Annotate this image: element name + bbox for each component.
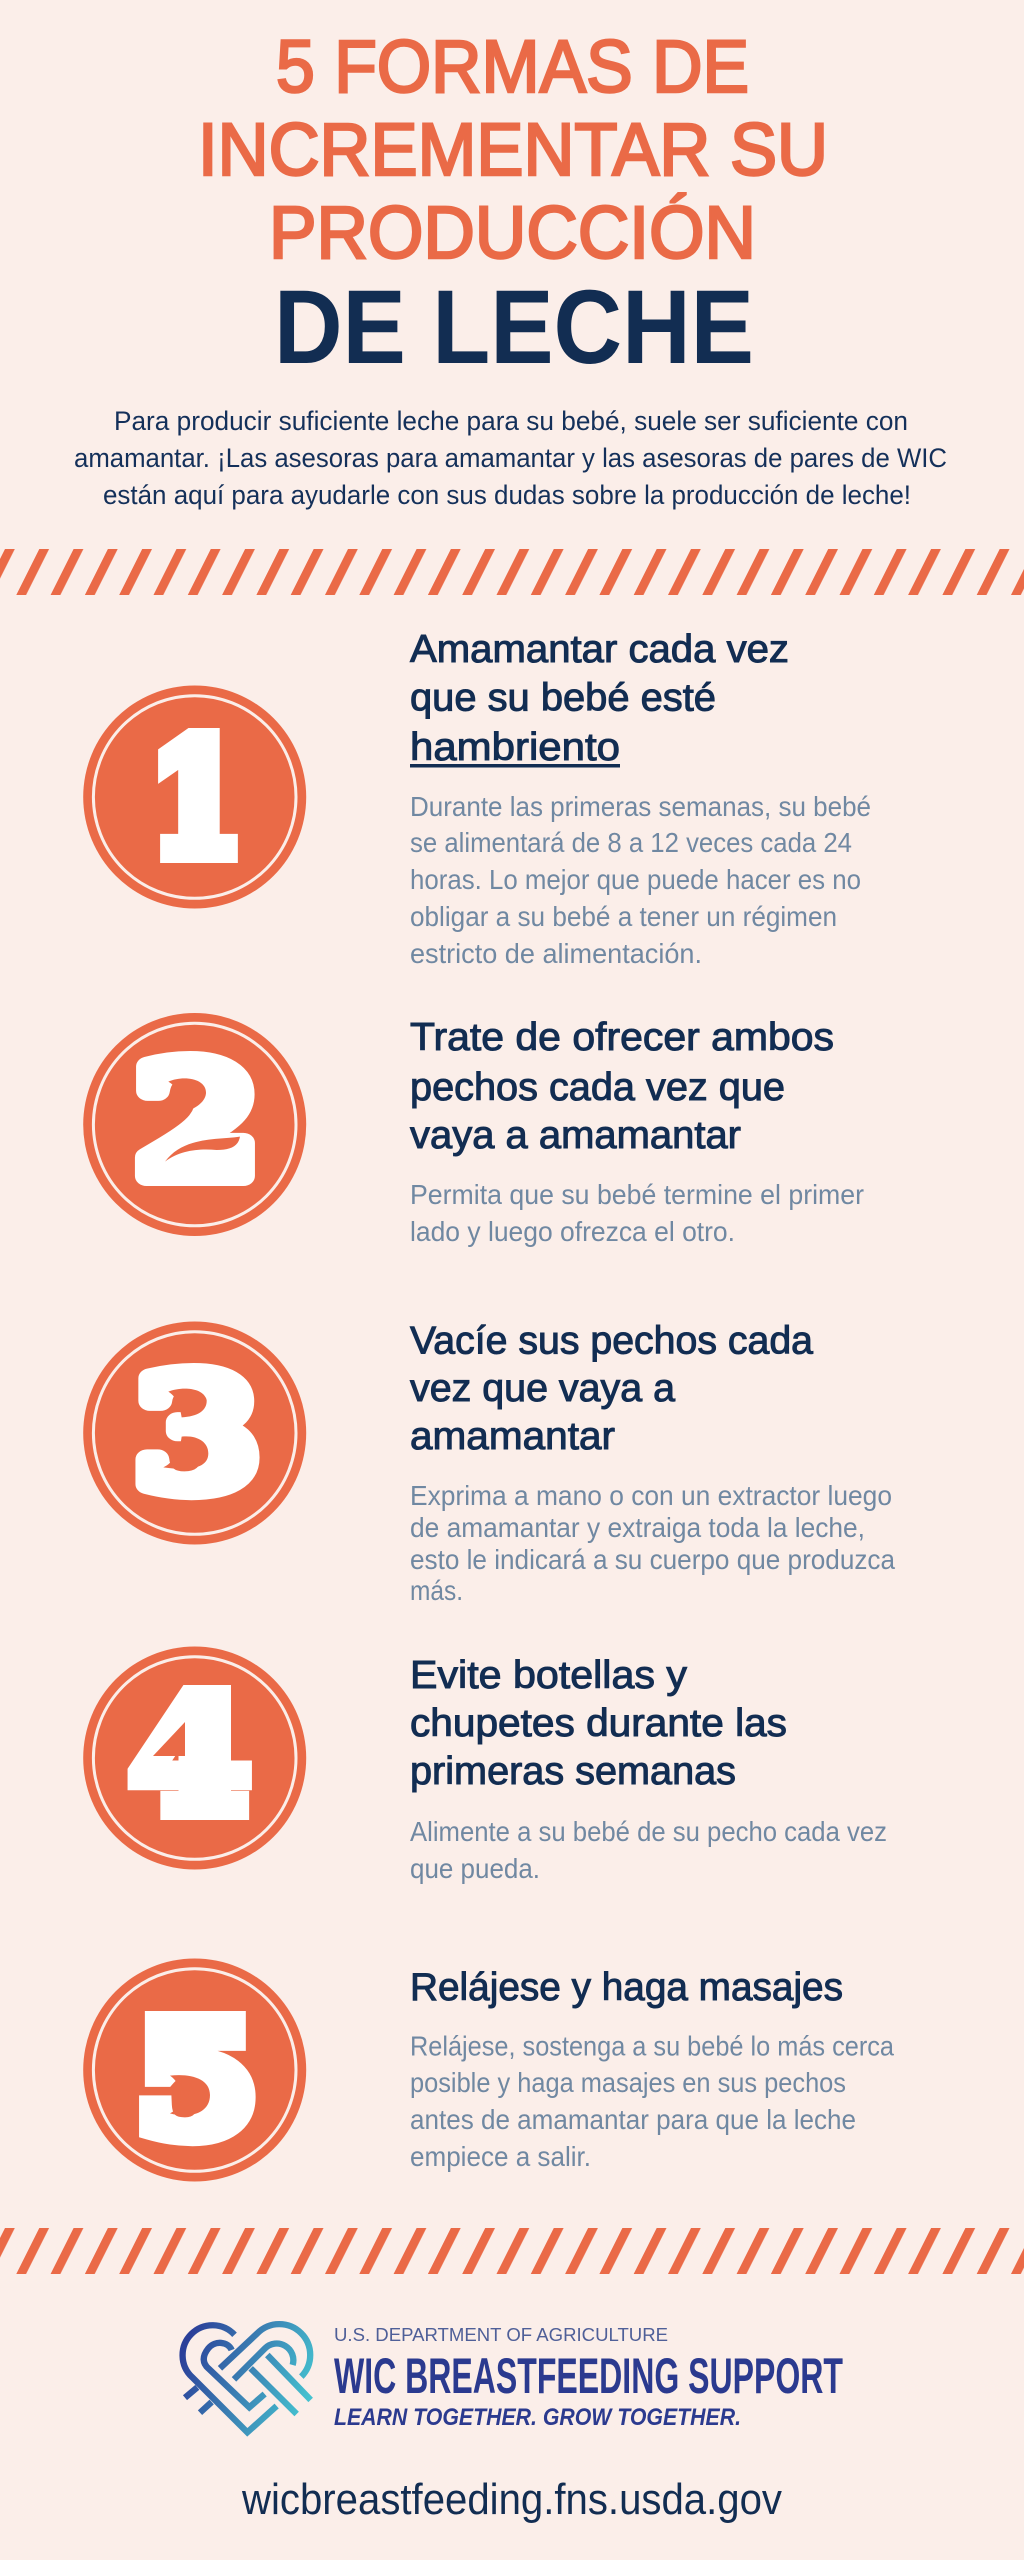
body: step 1: Durante las primeras semanas, su bebé	[410, 791, 871, 822]
title: 5 FORMAS DE	[276, 25, 749, 108]
heading: step 4: Evite botellas y	[410, 1654, 688, 1697]
body: step 1: estricto de alimentación.	[410, 938, 702, 969]
panel: step 5	[83, 1958, 894, 2182]
body: step 5	[410, 2030, 894, 2172]
title: PRODUCCIÓN	[269, 191, 756, 274]
intro text	[74, 406, 947, 510]
body: step 2	[410, 1179, 864, 1247]
intro text: amamantar. ¡Las asesoras para amamantar y las asesoras de pares de WIC	[74, 443, 947, 473]
website URL: wicbreastfeeding.fns.usda.gov	[241, 2475, 782, 2524]
body: step 1: se alimentará de 8 a 12 veces cada 24	[410, 827, 852, 858]
heading: step 1	[410, 628, 789, 769]
intro text: Para producir suficiente leche para su bebé, suele ser suficiente con	[114, 406, 908, 436]
body: step 5: posible y haga masajes en sus pechos	[410, 2067, 846, 2098]
body: step 3: esto le indicará a su cuerpo que produzca	[410, 1544, 895, 1575]
body: step 3: más.	[410, 1575, 463, 1606]
heading: step 2: Trate de ofrecer ambos	[410, 1016, 834, 1059]
stripe band top	[0, 549, 1024, 595]
body: step 5: antes de amamantar para que la leche	[410, 2104, 856, 2135]
body: step 1: horas. Lo mejor que puede hacer es no	[410, 864, 861, 895]
icon: number 3 badge: 3	[134, 1342, 260, 1525]
icon: number 1 badge: 1	[150, 707, 242, 890]
heading: step 4: chupetes durante las	[410, 1702, 787, 1745]
stripe band bottom	[0, 2228, 1024, 2274]
icon: number 5 badge	[83, 1958, 306, 2182]
heading: step 1: que su bebé esté	[410, 676, 716, 720]
heading: step 2	[410, 1016, 834, 1157]
icon: number 1 badge	[83, 686, 306, 908]
body: step 3: de amamantar y extraiga toda la leche,	[410, 1512, 865, 1543]
panel: step 1	[83, 628, 871, 969]
title	[198, 25, 828, 386]
heading: step 1: hambriento	[410, 726, 620, 769]
heading: step 4	[410, 1654, 787, 1793]
panel: step 3	[83, 1320, 895, 1606]
icon: number 4 badge	[83, 1646, 306, 1870]
title: INCREMENTAR SU	[198, 108, 828, 191]
body: step 4	[410, 1816, 887, 1884]
heading: step 5: Relájese y haga masajes	[410, 1966, 843, 2009]
body: step 2: lado y luego ofrezca el otro.	[410, 1216, 735, 1247]
heading: step 2: vaya a amamantar	[410, 1114, 741, 1157]
heading: step 4: primeras semanas	[410, 1750, 736, 1793]
icon: number 2 badge: 2	[134, 1030, 260, 1213]
body: step 4: que pueda.	[410, 1853, 540, 1884]
heading: step 3: vez que vaya a	[410, 1367, 675, 1410]
body: step 4: Alimente a su bebé de su pecho cada vez	[410, 1816, 887, 1847]
icon: number 3 badge	[83, 1322, 306, 1544]
heading: step 3: Vacíe sus pechos cada	[410, 1320, 813, 1362]
body: step 3	[410, 1480, 895, 1606]
body: step 3: Exprima a mano o con un extractor luego	[410, 1480, 892, 1511]
icon: number 4 badge: 4	[132, 1664, 248, 1847]
body: step 5: Relájese, sostenga a su bebé lo más cerca	[410, 2030, 894, 2062]
body: step 2: Permita que su bebé termine el primer	[410, 1179, 864, 1210]
body: step 1: obligar a su bebé a tener un régimen	[410, 901, 837, 932]
body: step 5: empiece a salir.	[410, 2141, 591, 2172]
icon: number 2 badge	[83, 1013, 306, 1236]
body: step 1	[410, 791, 871, 969]
logo: WIC Breastfeeding Support	[183, 2324, 843, 2432]
heading: step 3	[410, 1320, 813, 1458]
heading: step 2: pechos cada vez que	[410, 1066, 785, 1109]
panel: step 4	[83, 1646, 887, 1884]
icon: woven heart	[183, 2324, 311, 2432]
title: DE LECHE	[274, 269, 754, 386]
icon: number 5 badge: 5	[136, 1988, 258, 2171]
logo: department line: U.S. DEPARTMENT OF AGRICULTURE	[334, 2324, 668, 2345]
logo: tagline: LEARN TOGETHER. GROW TOGETHER.	[334, 2404, 741, 2431]
heading: step 1: Amamantar cada vez	[410, 628, 789, 671]
heading: step 3: amamantar	[410, 1415, 615, 1458]
intro text: están aquí para ayudarle con sus dudas sobre la producción de leche!	[103, 480, 911, 510]
panel: step 2	[83, 1013, 864, 1247]
